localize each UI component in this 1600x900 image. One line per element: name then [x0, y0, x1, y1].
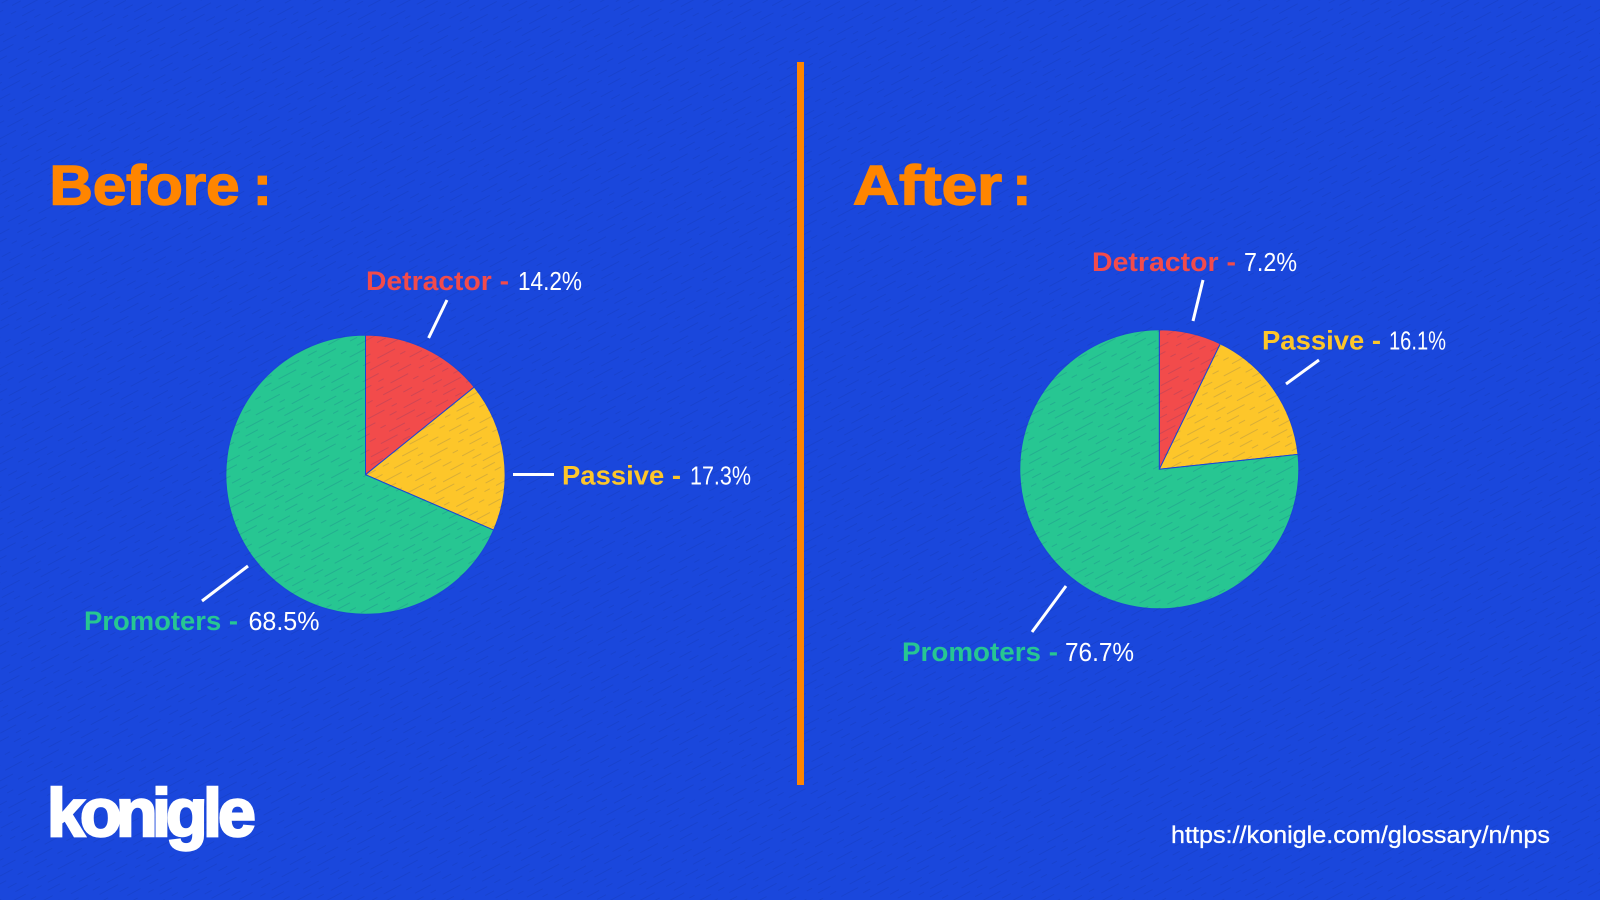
label: after promoters: Promoters -: [902, 637, 1058, 667]
label: before detractor: Detractor -: [366, 266, 509, 296]
label: after detractor: [1092, 247, 1297, 277]
divider: [797, 62, 804, 785]
leader line: after passive: [1286, 360, 1319, 384]
label: before passive: Passive -: [562, 460, 681, 490]
heading: before: Before: [50, 154, 240, 216]
label: before promoters: 68.5%: [248, 606, 320, 636]
source url: https://konigle.com/glossary/n/nps: [1171, 822, 1550, 849]
label: after detractor: 7.2%: [1244, 247, 1297, 277]
label: after passive: 16.1%: [1389, 326, 1446, 356]
leader line: before promoters: [202, 566, 248, 601]
label: after detractor: Detractor -: [1092, 247, 1236, 277]
leader line: before passive: [513, 473, 554, 476]
label: after promoters: 76.7%: [1065, 637, 1134, 667]
heading: after: :: [1012, 154, 1031, 216]
panel: after: [853, 154, 1446, 667]
label: before passive: [562, 460, 751, 490]
label: before detractor: 14.2%: [518, 266, 582, 296]
leader line: after promoters: [1032, 586, 1066, 632]
leader line: before detractor: [429, 300, 447, 338]
leader line: after detractor: [1193, 280, 1203, 321]
panel: before: [50, 154, 751, 636]
pie chart: after: [1020, 330, 1299, 609]
label: after passive: Passive -: [1262, 326, 1381, 356]
pie chart: before: [226, 335, 505, 614]
label: before passive: 17.3%: [690, 460, 751, 490]
heading: after: After: [853, 154, 1002, 216]
label: before promoters: Promoters -: [84, 606, 238, 636]
label: before detractor: [366, 266, 582, 296]
label: after passive: [1262, 326, 1446, 356]
logo: konigle: konigle: [47, 775, 256, 851]
label: before promoters: [84, 606, 320, 636]
heading: before: :: [253, 154, 272, 216]
label: after promoters: [902, 637, 1134, 667]
